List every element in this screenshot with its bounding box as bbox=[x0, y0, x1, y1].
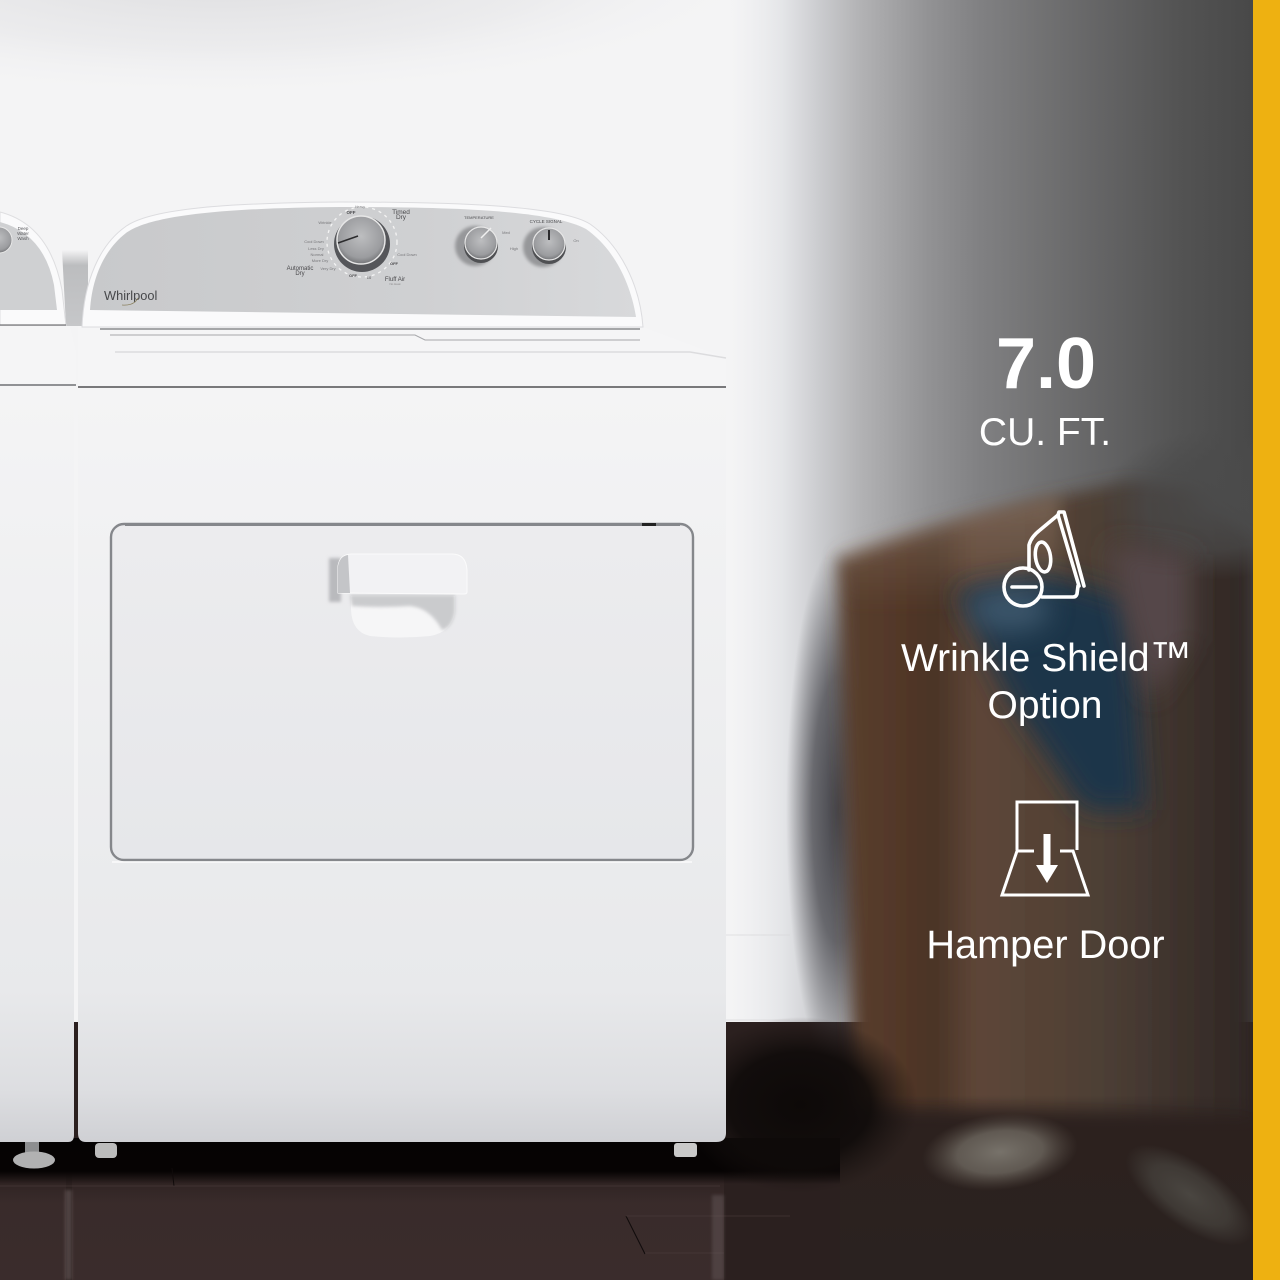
label: Hamper Door: Hamper Door bbox=[926, 923, 1165, 967]
dryer bbox=[78, 202, 726, 1158]
console labels: Wrinkle bbox=[318, 220, 332, 225]
console labels: Automatic bbox=[287, 266, 313, 272]
dryer top bbox=[78, 326, 726, 387]
console labels: Cool Down bbox=[304, 239, 324, 244]
console labels: OFF bbox=[349, 273, 358, 278]
console labels: Cool Down bbox=[397, 252, 417, 257]
neighbouring washer: Deep bbox=[18, 226, 29, 231]
background: blurred hamper with laundry bbox=[682, 430, 1280, 1280]
stat: 7.0 cu. ft. bbox=[979, 324, 1111, 454]
neighbouring washer bbox=[0, 212, 88, 1168]
capacity unit: CU. FT. bbox=[979, 411, 1111, 454]
background: floor bbox=[0, 1022, 1280, 1280]
console labels: OFF bbox=[390, 261, 399, 266]
console labels: Heavy bbox=[355, 205, 365, 209]
door handle bbox=[329, 554, 467, 638]
capacity value: 7.0 bbox=[996, 324, 1096, 404]
console labels: Normal bbox=[311, 252, 324, 257]
console labels: Timed bbox=[392, 209, 410, 216]
console labels: On bbox=[573, 238, 579, 243]
console labels: No Heat bbox=[389, 282, 401, 286]
icon: hamper door bbox=[1002, 802, 1088, 895]
neighbouring washer: Wash bbox=[17, 236, 29, 241]
console labels: Very Dry bbox=[320, 266, 336, 271]
console labels: Dry bbox=[295, 271, 305, 277]
console labels bbox=[287, 205, 579, 286]
neighbouring washer: Water bbox=[17, 231, 29, 236]
console labels: Dry bbox=[396, 214, 407, 221]
main dial bbox=[327, 207, 397, 277]
brand logo: Whirlpool bbox=[104, 288, 157, 303]
console labels: CYCLE SIGNAL bbox=[530, 219, 563, 224]
console labels: OFF bbox=[346, 210, 356, 215]
gap shadow between appliances bbox=[62, 250, 88, 326]
dryer cabinet bbox=[78, 387, 726, 1142]
cycle signal knob bbox=[523, 227, 566, 267]
console labels: More Dry bbox=[312, 258, 328, 263]
yellow side bar bbox=[1253, 0, 1280, 1280]
console labels: Fluff Air bbox=[385, 277, 405, 283]
temperature knob bbox=[455, 226, 498, 266]
console labels: High bbox=[510, 246, 518, 251]
label: Wrinkle Shield Option: Option bbox=[988, 684, 1102, 727]
dryer feet bbox=[95, 1143, 697, 1158]
console labels: 10 bbox=[367, 275, 372, 280]
console labels: Med bbox=[502, 230, 510, 235]
dryer door bbox=[111, 523, 693, 862]
console labels: Less Dry bbox=[308, 246, 324, 251]
label: Wrinkle Shield Option: Wrinkle Shield bbox=[901, 637, 1150, 680]
console labels: TEMPERATURE bbox=[464, 215, 494, 220]
control console bbox=[82, 202, 643, 327]
label: Wrinkle Shield Option: ™ bbox=[1150, 633, 1192, 680]
icon: iron with minus sign bbox=[1004, 512, 1084, 606]
